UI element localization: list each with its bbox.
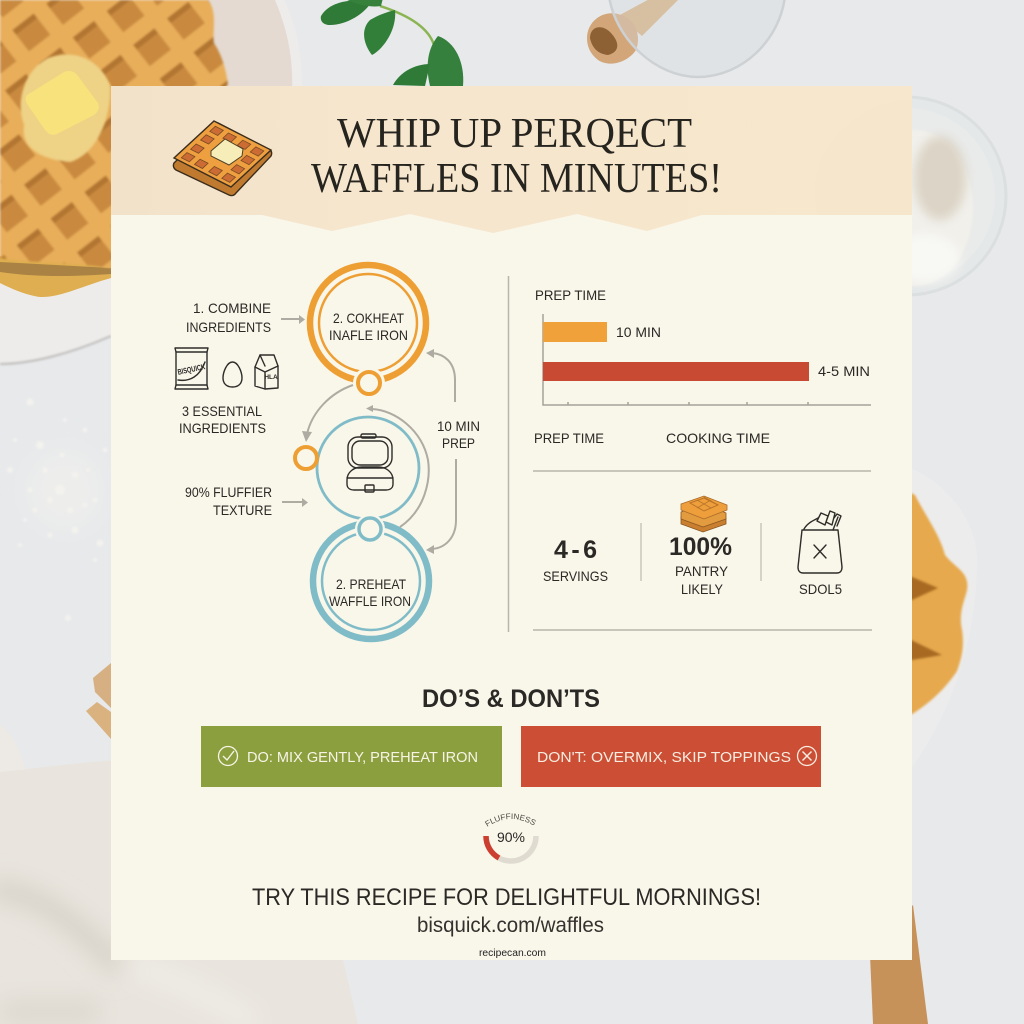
stat: pantry likely: PANTRY <box>675 563 729 579</box>
arrow: combine to step 1 <box>281 315 305 324</box>
bar label: 10 min: 10 MIN <box>616 324 661 340</box>
title <box>311 111 722 202</box>
stat: servings: 4-6 <box>554 536 597 564</box>
link: bisquick: bisquick.com/waffles <box>417 914 604 937</box>
icon: egg <box>223 362 242 387</box>
source credit: recipecan.com <box>479 948 546 959</box>
background: wooden spoon <box>587 0 682 64</box>
label: fluffier texture: 90% FLUFFIER <box>185 484 272 500</box>
stat: pantry likely <box>669 533 732 597</box>
bar label: 4-5 min: 4-5 MIN <box>818 363 870 379</box>
panel: quick stats <box>543 496 842 597</box>
title: WHIP UP PERQECT <box>337 111 692 157</box>
panel: don't box <box>521 726 821 787</box>
arrow: curved return <box>366 405 429 527</box>
icon: waffle stack <box>681 496 727 532</box>
panel: time bar chart <box>534 287 871 446</box>
gauge: fluffiness 90% <box>483 813 539 864</box>
step circle 1 orange <box>310 265 426 381</box>
panel body <box>111 86 912 960</box>
side node orange <box>295 447 317 469</box>
stat: pantry likely: 100% <box>669 533 732 561</box>
header banner <box>111 86 912 233</box>
connector gap teal <box>355 514 385 544</box>
gauge: fluffiness 90%: FLUFFINESS <box>484 813 536 826</box>
step circle 3 teal <box>313 523 429 639</box>
callout: 10 min prep: PREP <box>442 435 475 451</box>
icon: grocery bag <box>798 511 842 573</box>
label: combine ingredients <box>186 300 271 335</box>
background: right waffle and plate <box>905 466 977 776</box>
background: linen towel <box>0 725 358 1024</box>
arrow: node to side node <box>302 385 353 442</box>
arrow: down to step 3 <box>426 459 456 554</box>
label: 3 essential ingredients: INGREDIENTS <box>179 420 266 436</box>
background: flour spill <box>7 398 108 621</box>
arrow: up to step 1 <box>426 349 455 402</box>
icon: waffle iron <box>347 434 393 492</box>
label: fluffier texture <box>185 484 272 518</box>
stat: servings: SERVINGS <box>543 568 608 584</box>
background: wooden spatula <box>870 905 928 1024</box>
background: mint sprig <box>321 0 463 86</box>
callout: 10 min prep <box>437 418 480 451</box>
panel: process flow <box>175 265 480 639</box>
do text: DO: MIX GENTLY, PREHEAT IRON <box>247 749 478 766</box>
heading: do's and don'ts: DO’S & DON’TS <box>422 685 600 713</box>
background: wooden utensil left <box>86 663 111 739</box>
main panel <box>111 86 912 960</box>
connector node teal ring <box>359 518 381 540</box>
chart axes <box>543 314 871 405</box>
label: 3 essential ingredients <box>179 403 266 436</box>
connector gap orange <box>353 367 385 399</box>
step circle 1 orange: 2. COKHEAT <box>333 310 404 326</box>
step circle 3 teal: 2. PREHEAT <box>336 576 406 592</box>
stat: servings <box>543 536 608 584</box>
callout: 10 min prep: 10 MIN <box>437 418 480 434</box>
icon: check circle <box>218 746 238 766</box>
icon: milk carton: HLA <box>264 374 278 381</box>
icon: waffle with butter <box>173 121 272 196</box>
background: plate <box>0 0 302 365</box>
background: stacked waffle <box>0 0 228 297</box>
step circle 3 teal: WAFFLE IRON <box>329 593 411 609</box>
axis label: cooking time: COOKING TIME <box>666 430 770 446</box>
background: melting butter <box>21 54 110 162</box>
icon: cross circle <box>798 746 816 766</box>
chart heading: PREP TIME <box>535 287 606 303</box>
bar: cooking time <box>543 362 809 381</box>
icon: milk carton <box>255 355 278 389</box>
background: glass bowl <box>609 0 785 77</box>
stat: sdol5: SDOL5 <box>799 581 842 597</box>
label: combine ingredients: INGREDIENTS <box>186 319 271 335</box>
label: fluffier texture: TEXTURE <box>213 502 272 518</box>
label: combine ingredients: 1. COMBINE <box>193 300 271 316</box>
title: WAFFLES IN MINUTES! <box>311 156 722 202</box>
don't text: DON'T: OVERMIX, SKIP TOPPINGS <box>537 749 791 766</box>
label: 3 essential ingredients: 3 ESSENTIAL <box>182 403 262 419</box>
gauge: fluffiness 90%: 90% <box>497 829 525 845</box>
panel: do box <box>201 726 502 787</box>
call to action: TRY THIS RECIPE FOR DELIGHTFUL MORNINGS! <box>252 884 761 911</box>
icon: bisquick bag: BISQUICK <box>177 362 206 377</box>
step circle 2 teal with waffle iron <box>317 417 419 519</box>
axis label: prep time: PREP TIME <box>534 430 604 446</box>
stat: pantry likely: LIKELY <box>681 581 724 597</box>
connector node orange ring <box>358 372 380 394</box>
icon: bisquick bag <box>175 348 208 389</box>
bar: prep time <box>543 322 607 342</box>
step circle 1 orange: INAFLE IRON <box>329 327 408 343</box>
arrow: fluffier to step 2 <box>282 498 308 507</box>
background: flour bowl <box>808 97 1006 295</box>
